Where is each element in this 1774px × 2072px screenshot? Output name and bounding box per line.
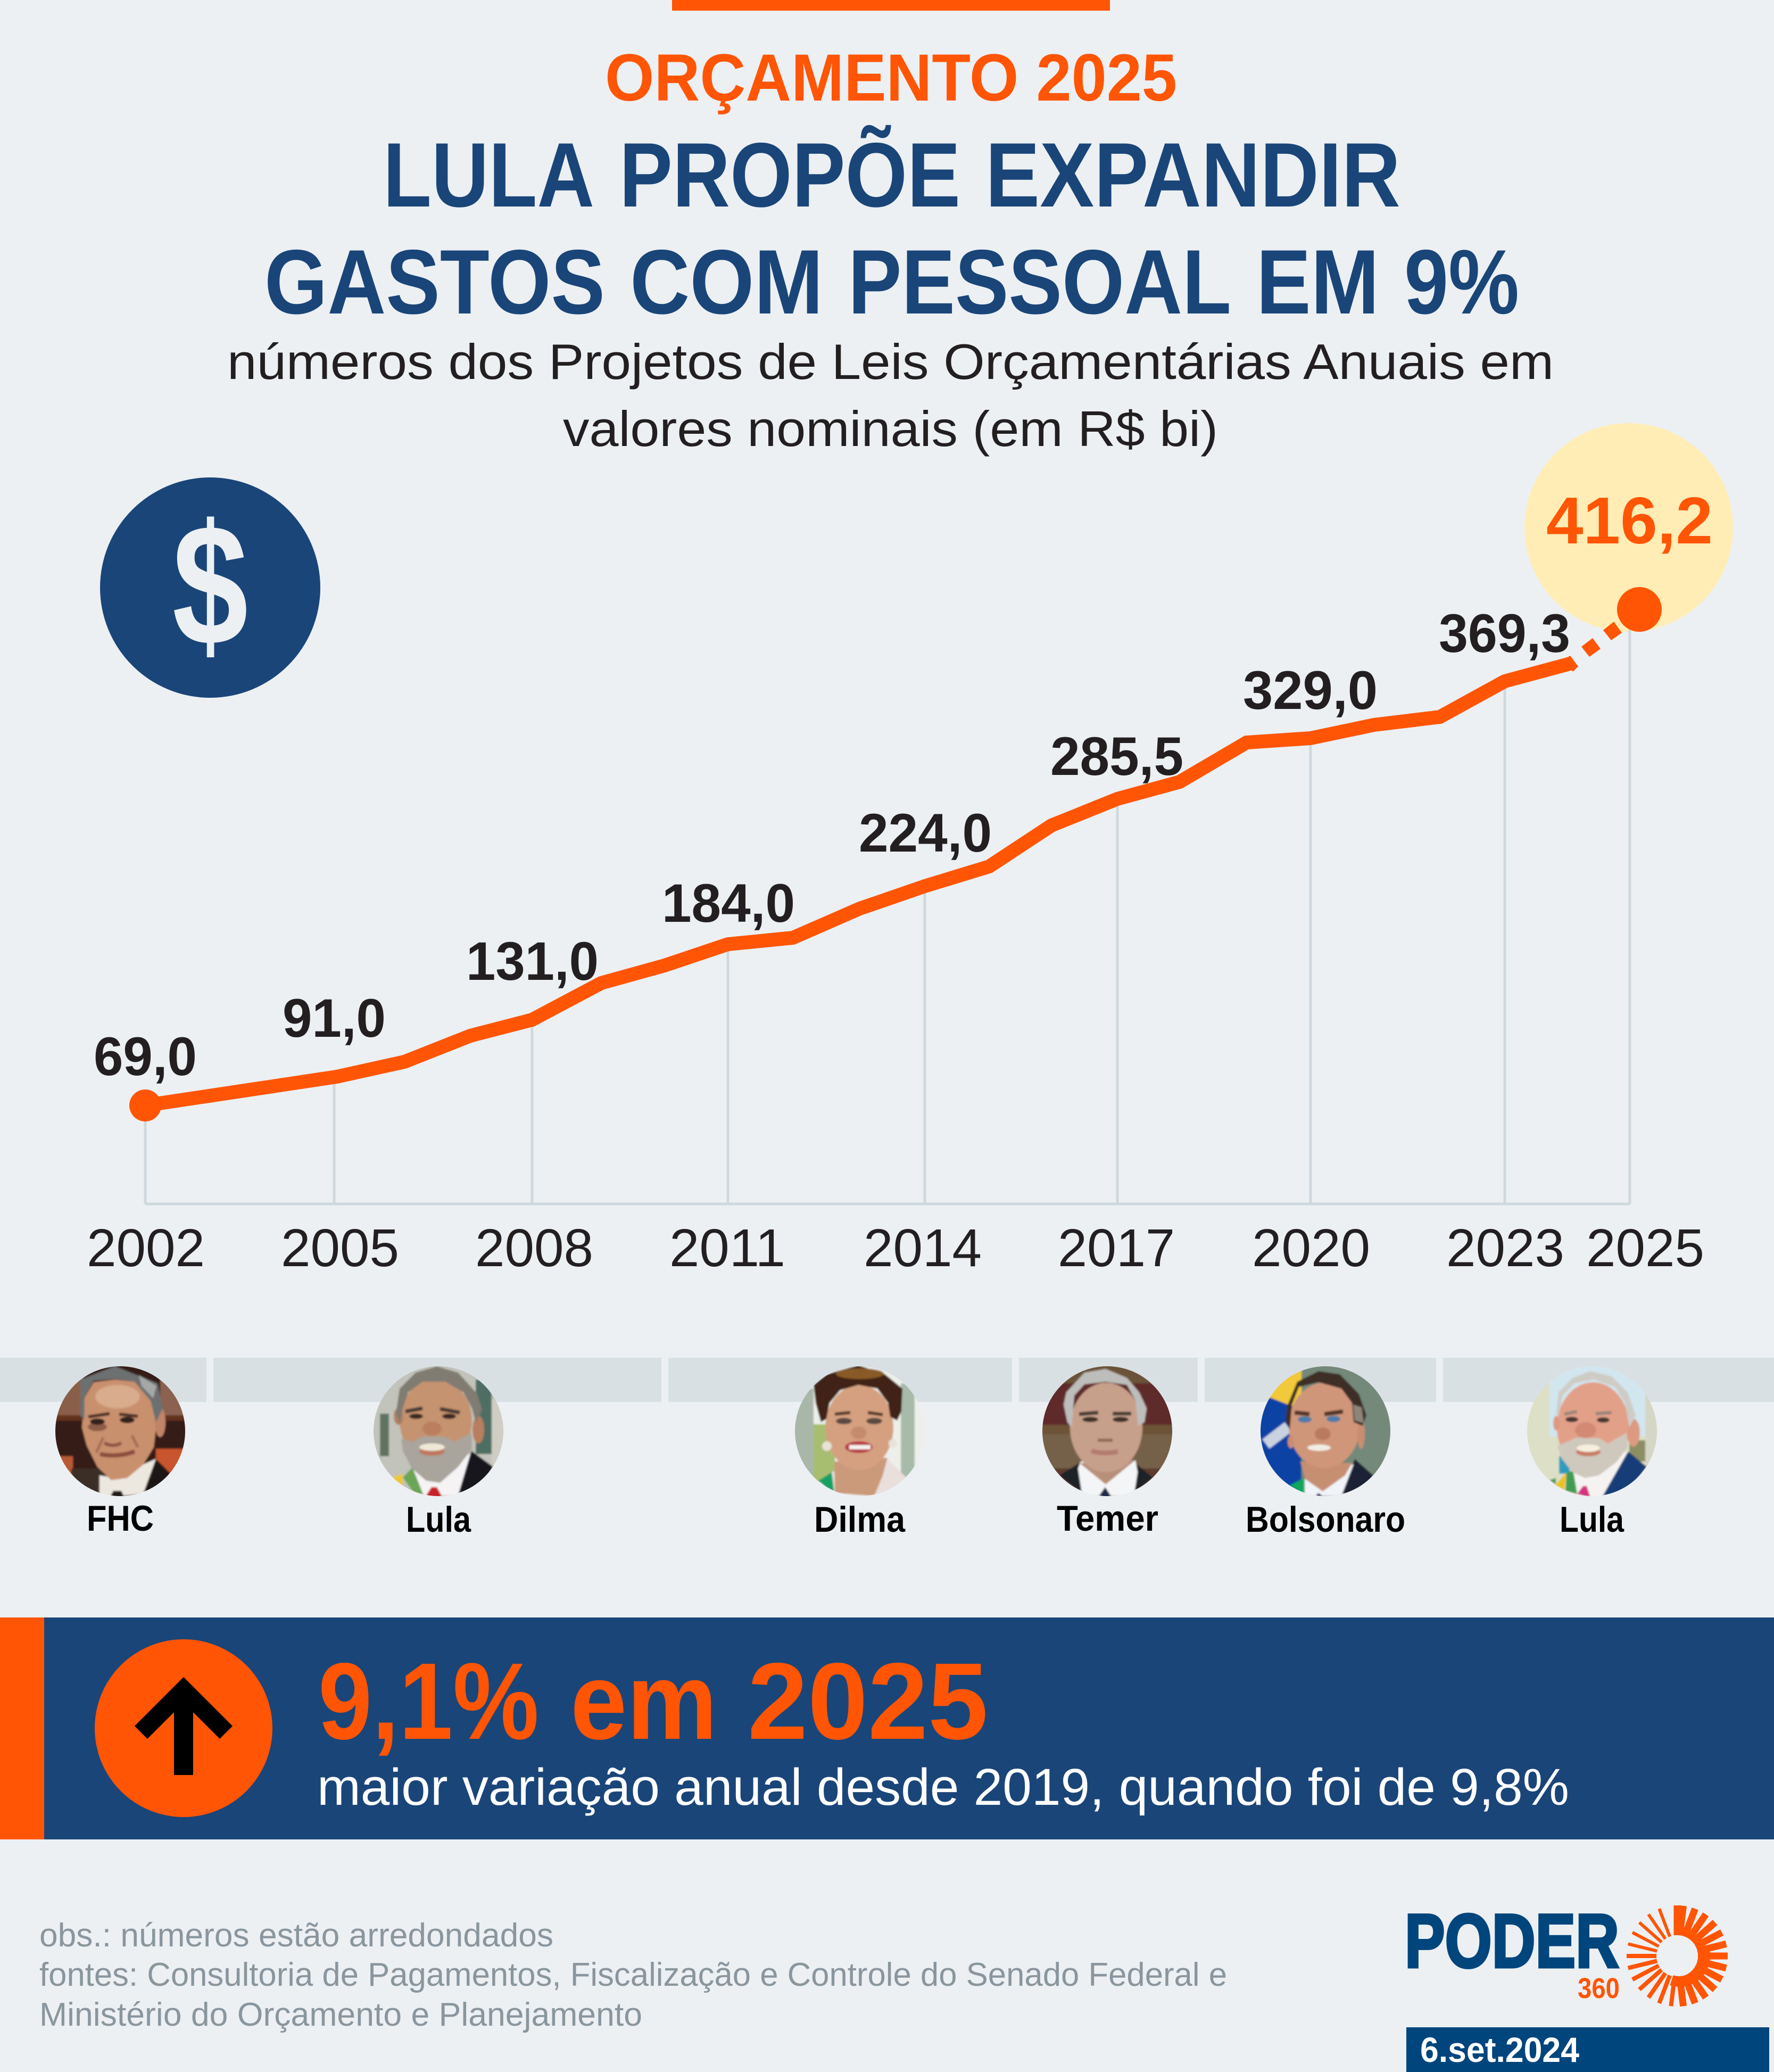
year axis labels: 2023 — [1446, 1218, 1564, 1278]
title: EM — [1256, 231, 1379, 333]
end point — [1617, 587, 1662, 632]
label: Lula: Lula — [1560, 1499, 1624, 1540]
title: LULA — [383, 124, 594, 226]
value labels: 69,0 — [94, 1026, 197, 1087]
footnote and sources: fontes: Consultoria de Pagamentos, Fiscalização e Controle do Senado Federal e — [39, 1957, 1227, 1993]
label: Lula: Lula — [406, 1499, 471, 1540]
value labels: 184,0 — [662, 873, 795, 934]
start point — [129, 1089, 161, 1121]
highlight circle for 2025 — [1524, 423, 1733, 632]
portrait: FHC — [55, 1366, 185, 1496]
chart grid and axis — [145, 628, 1630, 1204]
label: FHC: FHC — [87, 1498, 154, 1539]
callout panel: 9,1% em 2025 — [0, 1617, 1774, 1839]
subtitle: números dos Projetos de Leis Orçamentárias Anuais em — [227, 334, 1554, 390]
value labels: 91,0 — [283, 988, 386, 1049]
year axis labels: 2025 — [1586, 1218, 1704, 1278]
subtitle — [227, 334, 1554, 457]
label: Temer: Temer — [1057, 1498, 1158, 1539]
year axis labels: 2017 — [1058, 1218, 1175, 1278]
portrait: Dilma — [795, 1366, 925, 1496]
value labels: 369,3 — [1439, 603, 1570, 664]
date box — [1406, 2027, 1769, 2072]
callout headline — [318, 1640, 988, 1762]
portrait: Bolsonaro — [1261, 1366, 1390, 1496]
year axis labels: 2014 — [864, 1218, 982, 1278]
callout description: maior variação anual desde 2019, quando foi de 9,8% — [317, 1758, 1569, 1816]
date box: 6.set.2024 — [1420, 2030, 1579, 2069]
presidential term bands — [0, 1358, 1774, 1402]
title: 9% — [1404, 231, 1519, 333]
year axis labels: 2002 — [87, 1218, 205, 1278]
label: Dilma: Dilma — [814, 1499, 906, 1540]
title: PROPÕE — [619, 124, 960, 226]
logo sunburst — [1627, 1905, 1728, 2006]
title: EXPANDIR — [985, 124, 1400, 226]
icon: dollar coin: $ — [172, 489, 248, 681]
footnote and sources: obs.: números estão arredondados — [39, 1917, 553, 1954]
callout headline: 2025 — [748, 1640, 988, 1762]
year axis labels: 2008 — [475, 1218, 593, 1278]
year axis labels — [87, 1218, 1704, 1278]
footnote and sources: Ministério do Orçamento e Planejamento — [39, 1996, 642, 2033]
value labels: 285,5 — [1050, 726, 1183, 787]
title — [264, 124, 1519, 333]
callout headline: 9,1% — [318, 1640, 539, 1762]
projected dashes — [1564, 622, 1622, 672]
portrait: Temer — [1042, 1366, 1172, 1496]
icon: up arrow — [95, 1639, 272, 1817]
highlighted value 2025: 416,2 — [1546, 484, 1713, 558]
value labels: 329,0 — [1243, 660, 1378, 721]
line chart — [87, 423, 1733, 1278]
footnote and sources — [39, 1917, 1227, 2033]
logo: Poder360: PODER — [1405, 1899, 1619, 1984]
title: COM — [630, 231, 823, 333]
title: PESSOAL — [848, 231, 1231, 333]
callout headline: em — [570, 1640, 717, 1762]
value labels: 224,0 — [859, 803, 992, 863]
subtitle: valores nominais (em R$ bi) — [563, 401, 1218, 457]
title: GASTOS — [264, 231, 605, 333]
kicker: Orçamento 2025: ORÇAMENTO 2025 — [605, 41, 1177, 115]
value labels — [94, 603, 1570, 1087]
year axis labels: 2005 — [281, 1218, 399, 1278]
portrait: Lula 2023 — [1527, 1366, 1657, 1496]
top accent bar — [672, 0, 1110, 11]
data line — [145, 663, 1572, 1105]
portrait: Lula 2003 — [374, 1366, 503, 1496]
year axis labels: 2020 — [1252, 1218, 1370, 1278]
year axis labels: 2011 — [669, 1218, 785, 1278]
icon: dollar coin — [100, 477, 320, 698]
label: Bolsonaro: Bolsonaro — [1246, 1499, 1405, 1540]
logo: Poder360 — [1405, 1899, 1728, 2006]
value labels: 131,0 — [466, 931, 599, 992]
logo: Poder360: 360 — [1578, 1972, 1620, 2004]
